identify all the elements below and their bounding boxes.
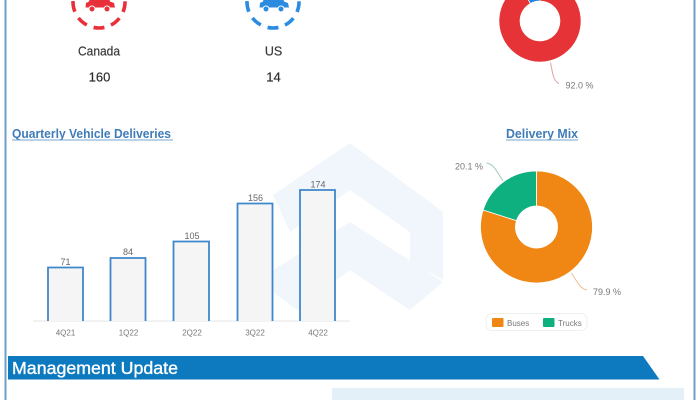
leader line: trucks bbox=[486, 163, 503, 181]
icon: red car in dashed circle bbox=[68, 0, 130, 33]
label: 20.1 %: 20.1 % bbox=[455, 162, 483, 172]
bar chart: quarterly deliveries: 105 bbox=[184, 231, 200, 241]
label: US: US bbox=[265, 44, 282, 58]
bar chart: quarterly deliveries: 174 bbox=[310, 180, 326, 190]
slice: Buses 79.9% bbox=[480, 171, 592, 283]
bar: 2Q22 bbox=[174, 242, 209, 321]
bar chart: quarterly deliveries: 84 bbox=[123, 247, 133, 257]
heading: Delivery Mix: Delivery Mix bbox=[506, 127, 578, 141]
label: Canada: Canada bbox=[78, 44, 120, 58]
bar chart: quarterly deliveries bbox=[33, 180, 350, 338]
slice: 92.0% red bbox=[499, 0, 581, 62]
value: 14: 14 bbox=[266, 70, 281, 84]
leader line: buses bbox=[572, 273, 587, 290]
section banner: Management Update: Management Update bbox=[12, 358, 178, 378]
chart: geographic donut bbox=[499, 0, 594, 90]
bar chart: quarterly deliveries: 156 bbox=[248, 193, 263, 203]
bar chart: quarterly deliveries: 1Q22 bbox=[119, 328, 139, 338]
slice: blue bbox=[520, 0, 540, 3]
bar chart: quarterly deliveries: 4Q21 bbox=[56, 328, 76, 338]
bar chart: quarterly deliveries: 71 bbox=[60, 257, 71, 267]
label: 92.0 %: 92.0 % bbox=[566, 80, 594, 90]
bar: 4Q21 bbox=[48, 268, 83, 321]
bar chart: quarterly deliveries: 2Q22 bbox=[182, 328, 202, 338]
label: 79.9 %: 79.9 % bbox=[593, 287, 621, 297]
heading: Quarterly Vehicle Deliveries: Quarterly Vehicle Deliveries bbox=[12, 127, 171, 141]
stat: US bbox=[242, 0, 304, 84]
watermark logo bbox=[273, 143, 443, 310]
legend item: Trucks: Trucks bbox=[558, 319, 582, 328]
legend item: Buses: Buses bbox=[507, 319, 529, 328]
legend bbox=[486, 314, 587, 330]
leader line bbox=[550, 62, 559, 84]
section banner: Management Update bbox=[8, 356, 660, 380]
bar chart: quarterly deliveries: 3Q22 bbox=[245, 328, 265, 338]
value: 160: 160 bbox=[89, 70, 110, 84]
bar: 3Q22 bbox=[238, 204, 272, 321]
bar: 4Q22 bbox=[300, 190, 335, 321]
chart: delivery mix donut bbox=[455, 162, 621, 297]
stat: Canada bbox=[68, 0, 130, 84]
bar chart: quarterly deliveries: 4Q22 bbox=[308, 328, 328, 338]
bar: 1Q22 bbox=[110, 258, 146, 321]
icon: blue car in dashed circle bbox=[242, 0, 304, 33]
slice: Trucks 20.1% bbox=[483, 171, 536, 221]
light blue panel bbox=[332, 388, 684, 400]
